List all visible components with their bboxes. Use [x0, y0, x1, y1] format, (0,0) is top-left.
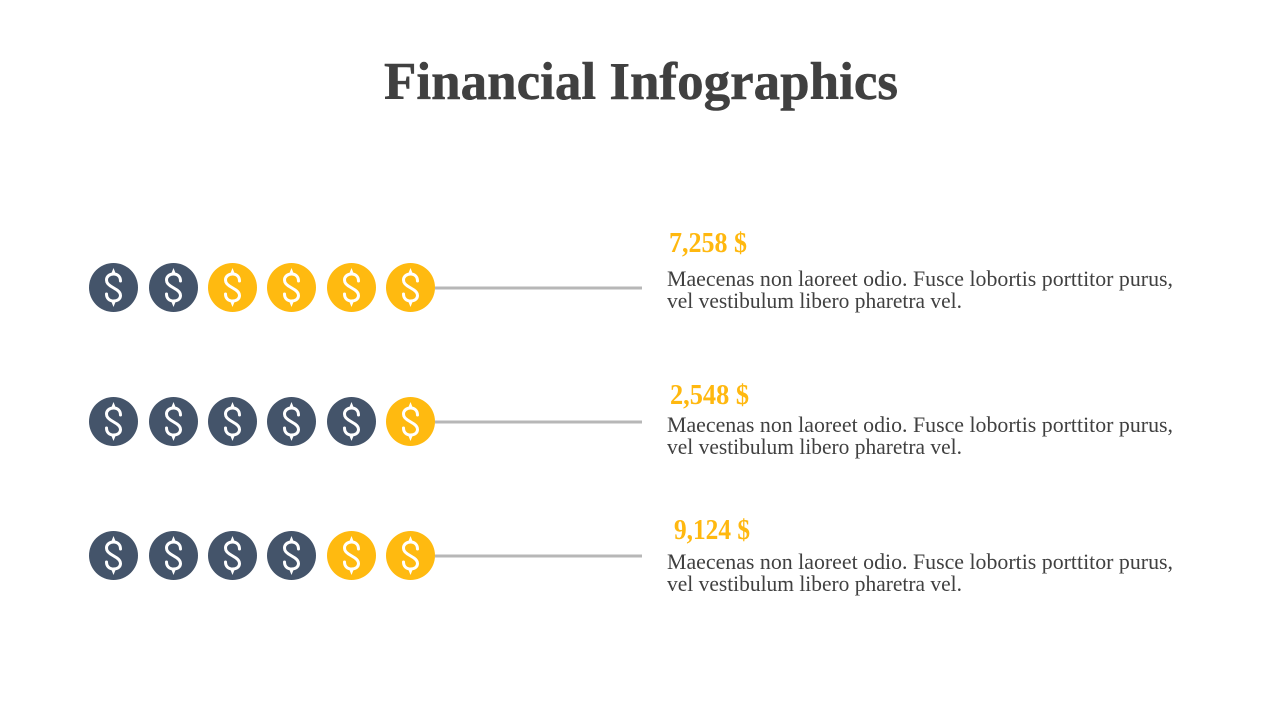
row 3 description: Maecenas non laoreet odio. Fusce lobortis porttitor purus, — [667, 549, 1173, 574]
row 2 amount: 2,548 $ — [670, 380, 749, 411]
row 3 connector line — [435, 554, 642, 558]
row 3 description — [667, 549, 1173, 596]
row 3 description: vel vestibulum libero pharetra vel. — [667, 571, 962, 596]
row 2 coins — [89, 397, 435, 446]
row 1 description — [667, 266, 1173, 313]
row 3 coins — [89, 531, 435, 580]
row 1 description: vel vestibulum libero pharetra vel. — [667, 288, 962, 313]
row 2 connector line — [435, 420, 642, 424]
row 1 amount: 7,258 $ — [669, 228, 747, 259]
row 1 coins — [89, 263, 435, 312]
row 2 description — [667, 412, 1173, 459]
row 1 description: Maecenas non laoreet odio. Fusce lobortis porttitor purus, — [667, 266, 1173, 291]
title: Financial Infographics — [384, 53, 898, 111]
row 2 description: vel vestibulum libero pharetra vel. — [667, 434, 962, 459]
row 2 description: Maecenas non laoreet odio. Fusce lobortis porttitor purus, — [667, 412, 1173, 437]
row 3 amount: 9,124 $ — [674, 515, 750, 546]
row 1 connector line — [435, 286, 642, 290]
